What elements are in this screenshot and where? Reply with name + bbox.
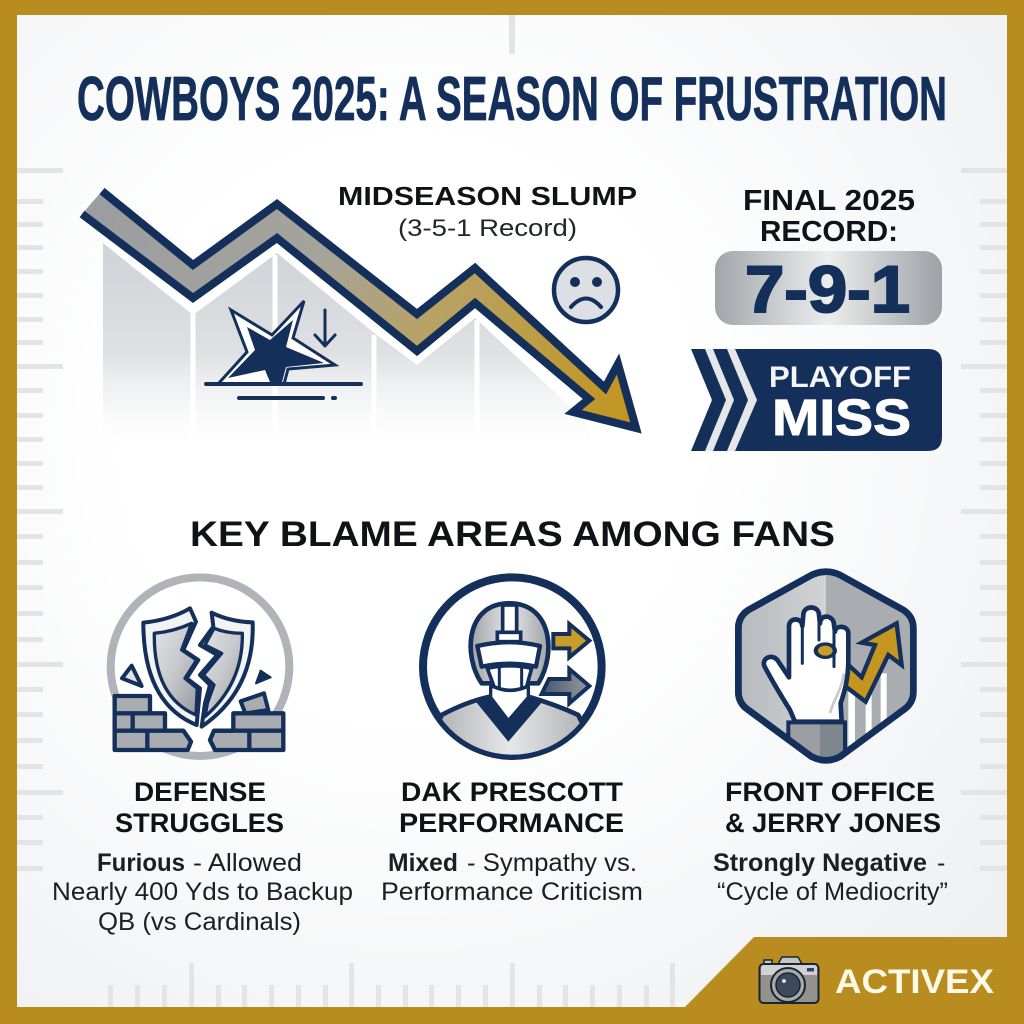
heading: PERFORMANCE bbox=[399, 808, 624, 838]
description bbox=[713, 849, 948, 906]
description bbox=[52, 849, 353, 936]
description: Strongly Negative bbox=[713, 849, 927, 877]
record badge 7-9-1 bbox=[715, 251, 942, 326]
heading bbox=[725, 777, 941, 838]
description: “Cycle of Mediocrity” bbox=[717, 878, 948, 906]
icon: quarterback helmet bbox=[413, 577, 607, 777]
description: Furious bbox=[97, 849, 185, 877]
heading: FRONT OFFICE bbox=[725, 777, 935, 807]
downward trend arrow bbox=[82, 191, 636, 428]
heading: DAK PRESCOTT bbox=[401, 777, 624, 807]
icon: fallen star bbox=[218, 301, 335, 384]
icon: sad face bbox=[554, 258, 618, 322]
faded bars under trend line bbox=[103, 243, 590, 447]
column 1: defense struggles bbox=[52, 777, 353, 936]
icon: broken shield and bricks bbox=[111, 577, 289, 756]
description: Mixed bbox=[388, 849, 458, 877]
playoff miss banner bbox=[691, 349, 942, 451]
icon: small down arrow bbox=[315, 310, 335, 346]
column 3: front office and jerry jones bbox=[713, 777, 948, 906]
heading bbox=[399, 777, 624, 838]
heading: STRUGGLES bbox=[115, 808, 284, 838]
icon: camera bbox=[760, 957, 818, 1003]
heading: & JERRY JONES bbox=[725, 808, 941, 838]
line chart: midseason slump bbox=[82, 191, 636, 447]
description: Nearly 400 Yds to Backup bbox=[52, 878, 353, 906]
record badge 7-9-1: 7-9-1 bbox=[745, 252, 910, 326]
description: Performance Criticism bbox=[381, 878, 643, 906]
description: - Allowed bbox=[193, 849, 302, 877]
icon: hand with ring and rising arrow bbox=[738, 572, 913, 763]
final record heading: RECORD: bbox=[760, 216, 898, 248]
heading: DEFENSE bbox=[134, 777, 266, 807]
final record heading: FINAL 2025 bbox=[743, 185, 915, 217]
brand name: ACTIVEX bbox=[835, 963, 994, 1001]
heading bbox=[115, 777, 284, 838]
description: QB (vs Cardinals) bbox=[98, 908, 301, 936]
record subheading: (3-5-1 Record) bbox=[398, 215, 577, 242]
description: - Sympathy vs. bbox=[467, 849, 637, 877]
ground lines bbox=[206, 384, 361, 398]
final record heading bbox=[743, 185, 915, 248]
midseason slump heading: MIDSEASON SLUMP bbox=[338, 181, 637, 211]
description bbox=[381, 849, 643, 906]
playoff miss banner: PLAYOFF bbox=[769, 361, 911, 394]
section heading: key blame areas: KEY BLAME AREAS AMONG FANS bbox=[190, 515, 835, 554]
description: - bbox=[937, 849, 945, 877]
playoff miss banner: MISS bbox=[772, 389, 911, 446]
column 2: dak prescott performance bbox=[381, 777, 643, 906]
